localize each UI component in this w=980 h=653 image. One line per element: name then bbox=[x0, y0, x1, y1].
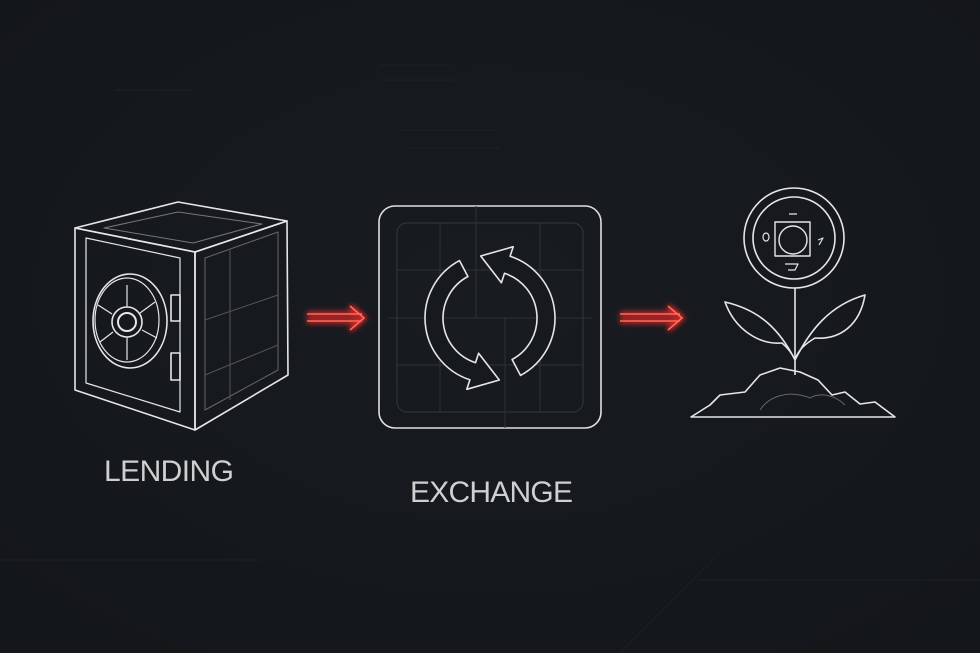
icon: coin plant bbox=[691, 188, 895, 417]
icon: safe bbox=[75, 202, 288, 430]
icon: exchange box bbox=[379, 206, 601, 428]
arrow: exchange to growth bbox=[620, 306, 682, 330]
arrow: lending to exchange bbox=[307, 306, 364, 330]
label: lending: LENDING bbox=[104, 455, 235, 488]
label: exchange: EXCHANGE bbox=[410, 476, 574, 509]
